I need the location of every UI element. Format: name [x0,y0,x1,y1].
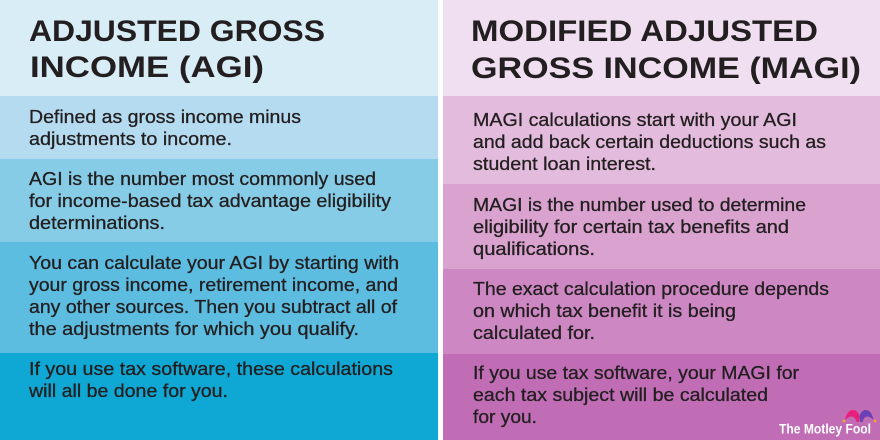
AGI row 4: If you use tax software, these calculations [29,359,393,379]
AGI header band: INCOME (AGI) [30,51,264,84]
MAGI row 4 [443,354,880,440]
MAGI row 2: qualifications. [473,239,595,259]
MAGI row 4: If you use tax software, your MAGI for [473,363,799,383]
AGI row 3: You can calculate your AGI by starting with [29,253,399,273]
MAGI header band [443,0,880,96]
AGI row 3: your gross income, retirement income, and [29,275,398,295]
AGI header band: ADJUSTED GROSS [29,15,325,48]
logo: The Motley Fool: The Motley Fool [779,422,871,436]
AGI row 3: the adjustments for which you qualify. [29,319,359,339]
MAGI row 1: and add back certain deductions such as [473,132,826,152]
MAGI row 3: calculated for. [473,323,595,343]
MAGI row 1 [443,96,880,184]
AGI row 3: any other sources. Then you subtract all of [29,297,398,317]
MAGI row 1: student loan interest. [473,154,656,174]
MAGI row 1: MAGI calculations start with your AGI [473,110,797,130]
MAGI row 4: for you. [473,407,537,427]
MAGI header band: MODIFIED ADJUSTED [471,15,818,48]
AGI row 3 [0,242,438,353]
AGI row 2: for income-based tax advantage eligibility [29,191,391,211]
AGI row 1: Defined as gross income minus [29,107,301,127]
AGI row 2: AGI is the number most commonly used [29,169,376,189]
AGI row 1: adjustments to income. [29,129,232,149]
MAGI row 2: MAGI is the number used to determine [473,195,806,215]
AGI row 4: will all be done for you. [28,381,228,401]
AGI row 2 [0,159,438,242]
AGI row 4 [0,353,438,440]
AGI row 1 [0,96,438,159]
MAGI row 4: each tax subject will be calculated [473,385,768,405]
MAGI row 3 [443,269,880,354]
panel: MAGI [443,0,880,440]
MAGI row 3: The exact calculation procedure depends [473,279,829,299]
MAGI row 3: on which tax benefit it is being [473,301,736,321]
MAGI row 2 [443,184,880,269]
AGI row 2: determinations. [29,213,165,233]
MAGI header band: GROSS INCOME (MAGI) [471,52,861,85]
icon: jester hat [843,410,876,422]
panel: AGI [0,0,438,440]
logo: The Motley Fool [779,410,876,436]
AGI header band [0,0,438,96]
MAGI row 2: eligibility for certain tax benefits and [473,217,789,237]
